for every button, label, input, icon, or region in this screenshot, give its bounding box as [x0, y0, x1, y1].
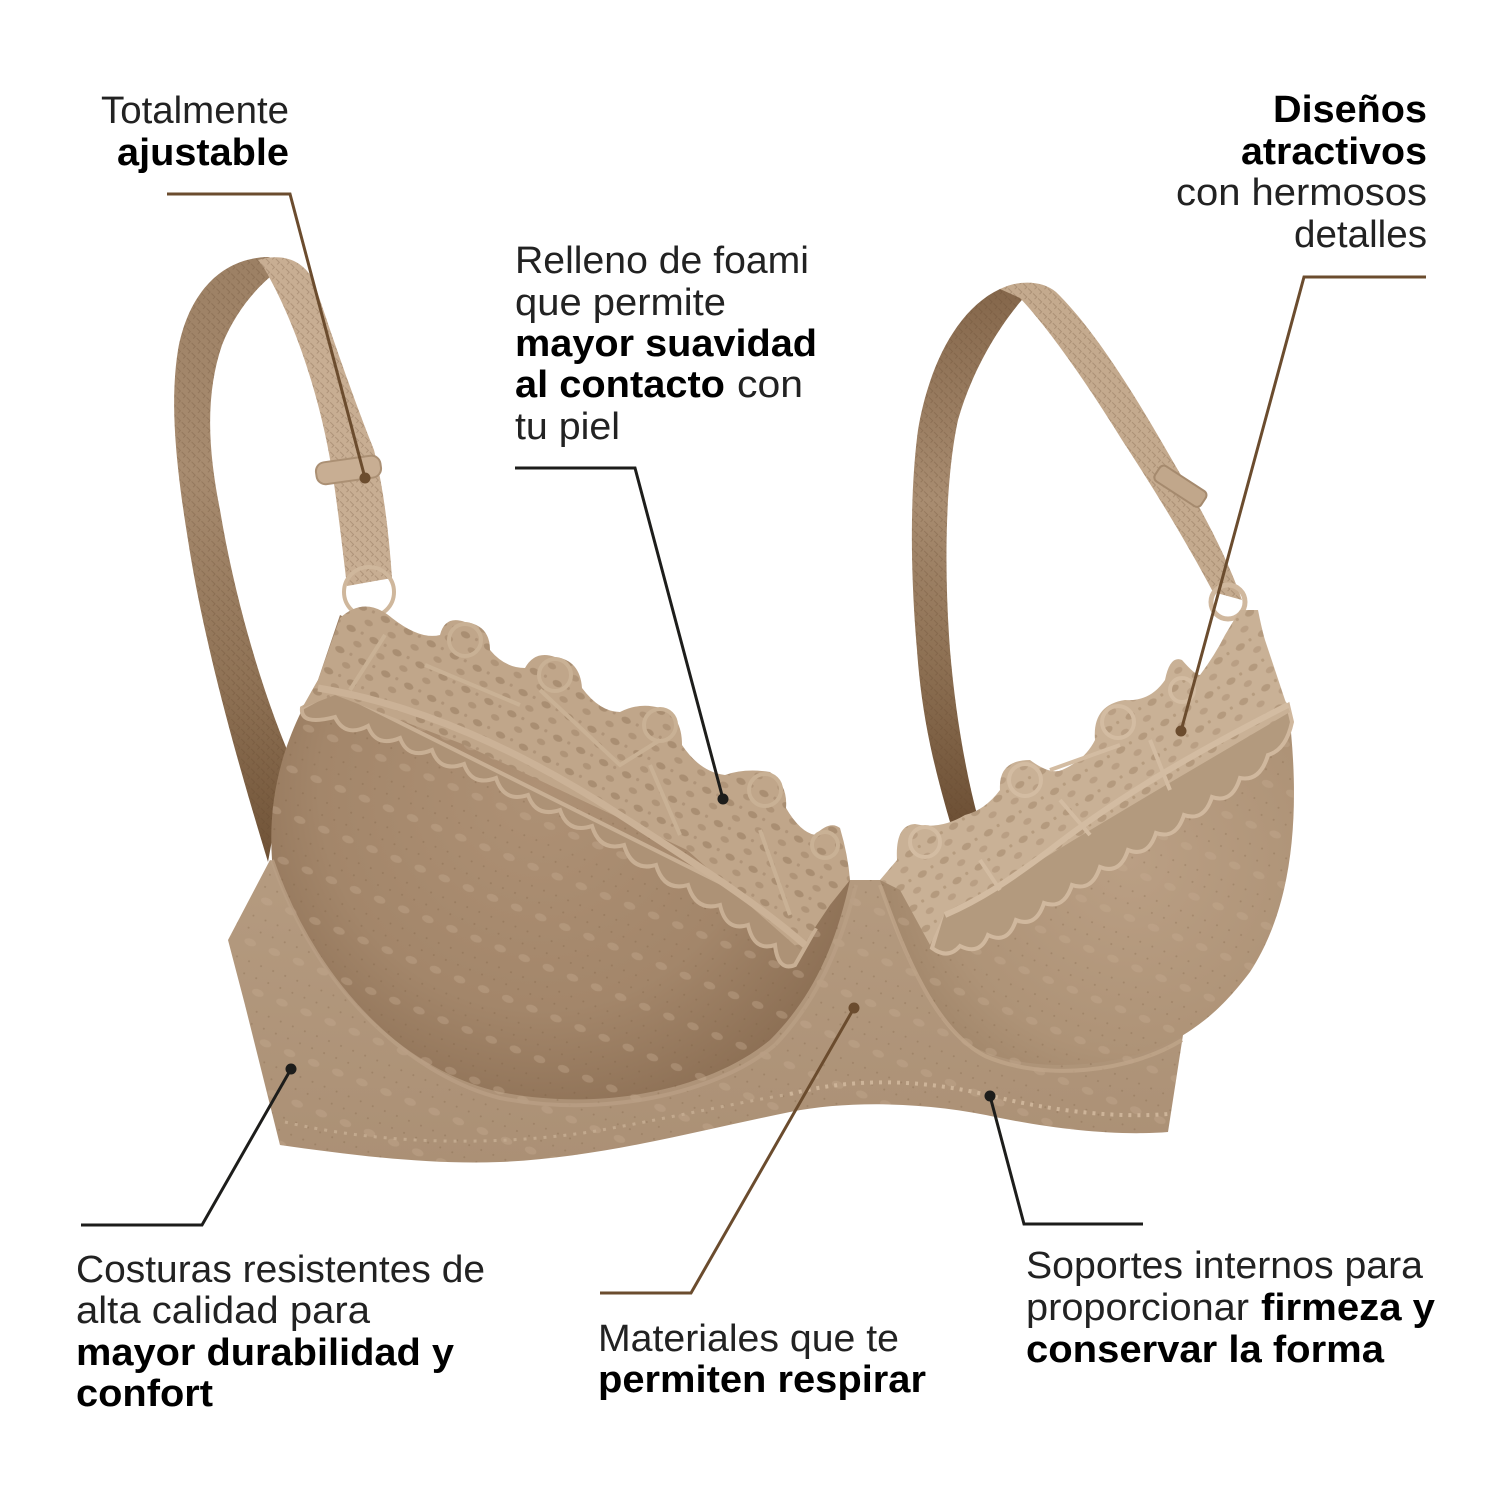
- callout: materiales transpirables: [598, 1002, 926, 1401]
- callout: relleno de foami: que permite: [515, 282, 726, 324]
- callout: diseños atractivos: detalles: [1294, 214, 1427, 256]
- left slider: [315, 455, 382, 485]
- callout: diseños atractivos: Diseños: [1273, 89, 1427, 131]
- callout: relleno de foami: tu piel: [515, 406, 620, 448]
- left cup seam: [272, 860, 856, 1105]
- lace body: [302, 606, 850, 950]
- left strap: [174, 257, 394, 862]
- left cup: [271, 615, 856, 1105]
- callout: costuras resistentes: alta calidad para: [76, 1290, 371, 1332]
- callout: relleno de foami: con: [737, 364, 803, 406]
- left lace trim: [302, 606, 850, 966]
- right lace trim: [880, 610, 1292, 954]
- right slider: [1152, 464, 1208, 509]
- lace body: [880, 610, 1290, 945]
- callout: costuras resistentes: [76, 1064, 485, 1415]
- lace hem ribbon: [945, 705, 1288, 915]
- right cup seam: [880, 885, 1182, 1071]
- left ring: [344, 567, 394, 617]
- callout: relleno de foami: Relleno de foami: [515, 240, 809, 282]
- callout: costuras resistentes: Costuras resistentes de: [76, 1249, 485, 1291]
- stitching: [790, 1082, 1168, 1115]
- callout: soportes internos: conservar la forma: [1026, 1329, 1385, 1371]
- callout: costuras resistentes: mayor durabilidad y: [76, 1332, 454, 1374]
- callout: soportes internos: firmeza y: [1261, 1287, 1435, 1329]
- lace hem ribbon: [318, 688, 805, 945]
- lower scallop hem: [932, 705, 1292, 954]
- callout: relleno de foami: mayor suavidad: [515, 323, 817, 365]
- callout: soportes internos: [984, 1090, 1435, 1371]
- callout: relleno de foami: al contacto: [515, 364, 725, 406]
- callout: relleno de foami: [515, 240, 817, 804]
- lace motifs: [350, 624, 838, 915]
- lower scallop hem: [302, 690, 815, 966]
- right cup: [880, 705, 1294, 1071]
- right strap: [912, 283, 1245, 822]
- lace motifs: [910, 678, 1194, 890]
- callout: soportes internos: Soportes internos para: [1026, 1245, 1424, 1287]
- under band and center gore: [228, 860, 1183, 1163]
- callout: materiales transpirables: permiten respirar: [598, 1359, 926, 1401]
- callout: materiales transpirables: Materiales que te: [598, 1318, 899, 1360]
- callout: diseños atractivos: [1176, 89, 1427, 736]
- callout: diseños atractivos: con hermosos: [1176, 172, 1427, 214]
- callout: totalmente ajustable: ajustable: [117, 132, 289, 174]
- right ring: [1211, 585, 1245, 619]
- callout: diseños atractivos: atractivos: [1241, 131, 1427, 173]
- callout: costuras resistentes: confort: [76, 1373, 213, 1415]
- callout: totalmente ajustable: Totalmente: [101, 90, 289, 132]
- callout: soportes internos: proporcionar: [1026, 1287, 1249, 1329]
- callout: totalmente ajustable: [101, 90, 370, 484]
